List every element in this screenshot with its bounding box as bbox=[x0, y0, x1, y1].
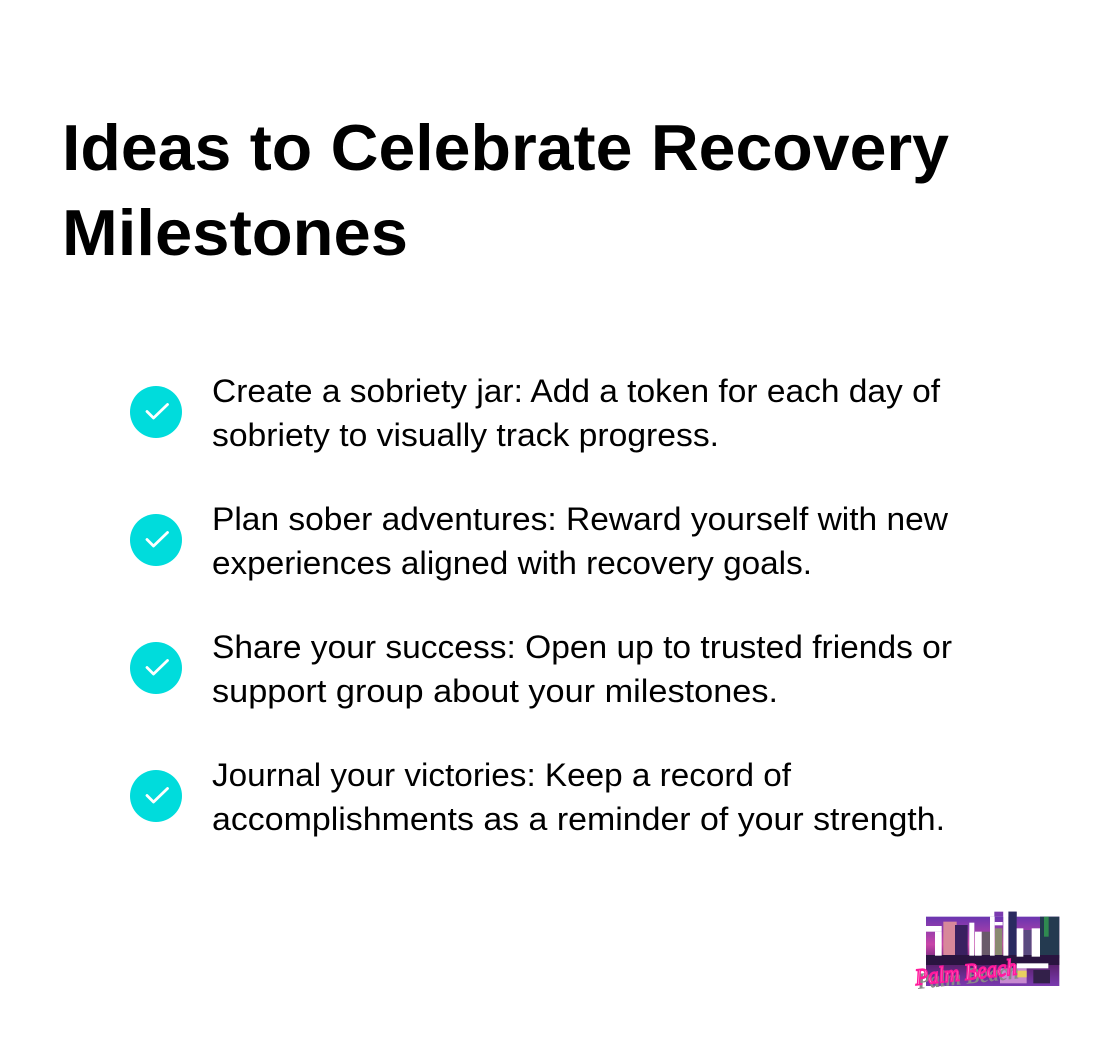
item text bbox=[212, 757, 945, 837]
item: sober adventures bbox=[130, 501, 949, 581]
item text: Plan sober adventures: Reward yourself with new bbox=[212, 501, 949, 537]
icon: check circle bbox=[130, 770, 182, 822]
logo script: Palm Beach: Palm Beach bbox=[913, 954, 1018, 990]
title bbox=[62, 111, 949, 269]
item text: Create a sobriety jar: Add a token for each day of bbox=[212, 373, 940, 409]
item text bbox=[212, 373, 940, 453]
checklist bbox=[130, 373, 952, 837]
item text bbox=[212, 629, 952, 709]
item text: support group about your milestones. bbox=[212, 673, 778, 709]
title: Ideas to Celebrate Recovery bbox=[62, 111, 949, 184]
item text: Journal your victories: Keep a record of bbox=[212, 757, 791, 793]
icon: check circle bbox=[130, 642, 182, 694]
item text bbox=[212, 501, 949, 581]
item text: sobriety to visually track progress. bbox=[212, 417, 719, 453]
item: share success bbox=[130, 629, 952, 709]
item text: accomplishments as a reminder of your strength. bbox=[212, 801, 945, 837]
item: journal victories bbox=[130, 757, 945, 837]
icon: check circle bbox=[130, 514, 182, 566]
logo: amitay Palm Beach bbox=[913, 912, 1059, 994]
icon: check circle bbox=[130, 386, 182, 438]
title: Milestones bbox=[62, 196, 408, 269]
logo script shadow: Palm Beach bbox=[915, 958, 1020, 994]
item text: Share your success: Open up to trusted friends or bbox=[212, 629, 952, 665]
item: sobriety jar bbox=[130, 373, 940, 453]
item text: experiences aligned with recovery goals. bbox=[212, 545, 812, 581]
